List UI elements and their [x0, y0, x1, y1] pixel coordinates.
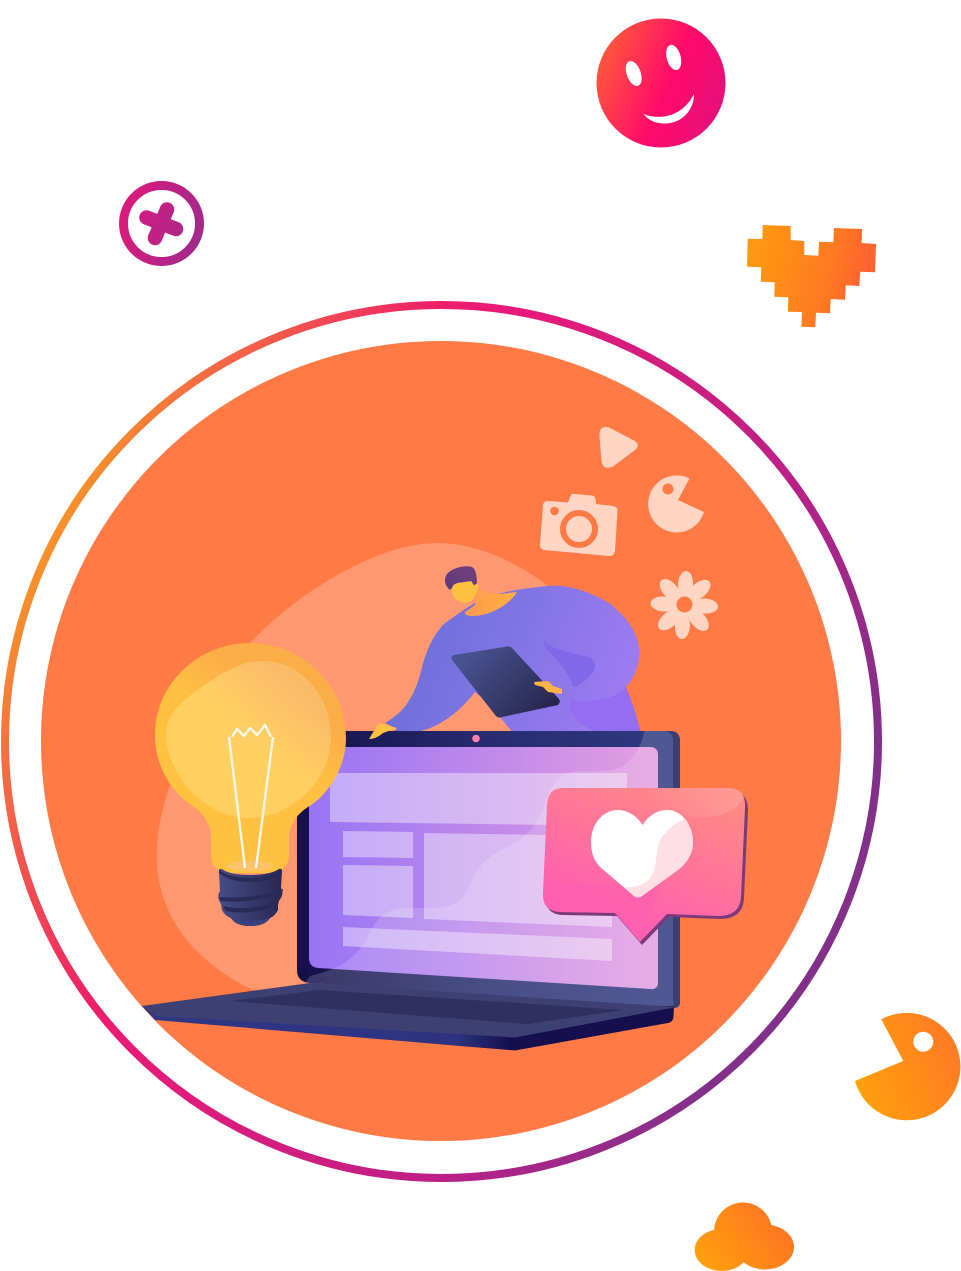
icon: pixel heart [747, 225, 876, 327]
person: hair [445, 566, 477, 590]
laptop: screen panels [330, 773, 627, 961]
person: face [452, 581, 478, 603]
icon: gradient ring [5, 305, 878, 1178]
icon: flower [650, 571, 718, 639]
bubble: top-right highlight [640, 788, 744, 817]
bubble: bottom-left shade [543, 883, 660, 942]
icon: small pacman [648, 475, 704, 532]
laptop: light overlay wave [300, 728, 690, 1012]
person [385, 566, 641, 733]
icon: cloud [695, 1202, 794, 1271]
icon: heart [591, 810, 693, 898]
bubble: body [543, 788, 745, 942]
laptop: webcam [472, 735, 480, 742]
bulb: filament [229, 725, 273, 868]
bulb: base glow [227, 860, 273, 872]
laptop: screen [309, 747, 658, 989]
orange background circle [41, 341, 841, 1141]
person: neck [465, 588, 517, 616]
laptop: right edge shade [666, 731, 680, 1008]
like notification bubble [543, 788, 748, 945]
bulb: inner highlight [166, 661, 331, 818]
bubble: shadow [545, 791, 748, 945]
person: hand on tablet [534, 681, 562, 694]
laptop [142, 728, 690, 1050]
laptop: base deck [142, 983, 677, 1038]
person: sleeve fold [544, 640, 595, 687]
icon: plus in circle [124, 186, 200, 262]
person: back of body [570, 685, 641, 733]
icon: camera [540, 494, 618, 556]
laptop: base front edge [142, 1006, 674, 1050]
person: tablet [451, 646, 560, 718]
laptop: lid [297, 731, 680, 1008]
icon: large pacman [855, 1013, 960, 1120]
background blob [157, 543, 600, 990]
light bulb [155, 643, 346, 926]
icon: play symbol [599, 427, 638, 468]
person: hand on laptop [369, 724, 397, 739]
icon: smiley face [596, 18, 726, 148]
laptop: keyboard [230, 990, 623, 1024]
bulb: screw cap [218, 869, 283, 926]
person: torso and arm [385, 586, 639, 733]
bulb: glass [155, 643, 346, 873]
